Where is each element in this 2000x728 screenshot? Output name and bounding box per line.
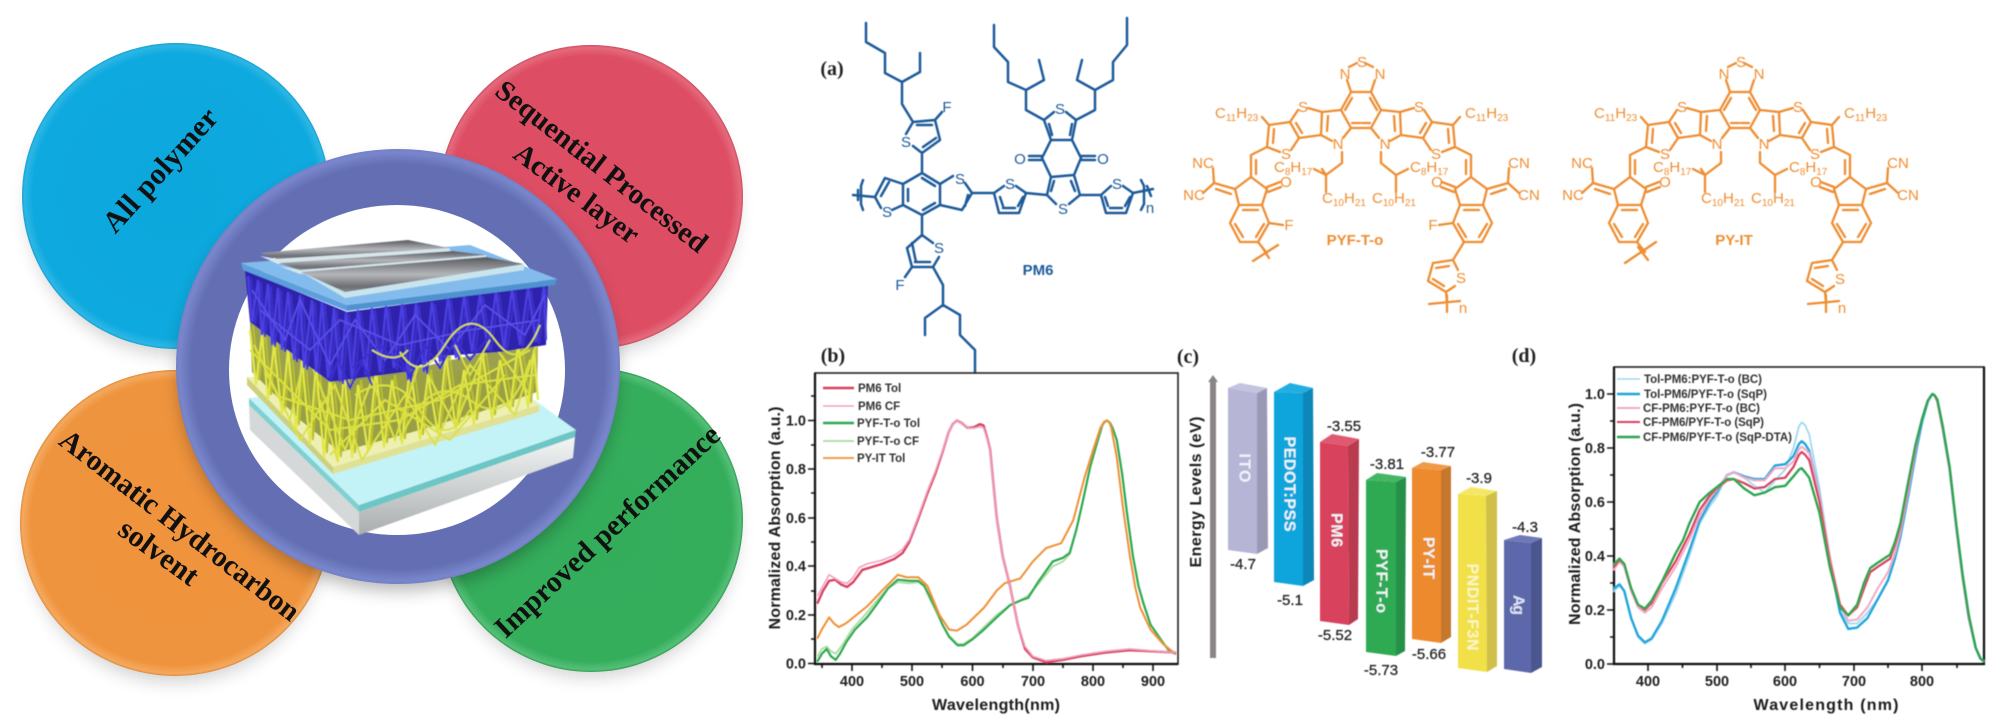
circle: sequential processed active layer: Active layer xyxy=(507,137,646,251)
chart axes xyxy=(767,373,1178,714)
structure: PY-IT: H xyxy=(1865,105,1876,122)
donor fibres: purple xyxy=(245,270,548,388)
circle: all polymer xyxy=(22,43,330,349)
structure: PYF-T-o: 8 xyxy=(1285,167,1291,178)
structure: PY-IT: 10 xyxy=(1712,198,1723,209)
panel label d: (d) xyxy=(1512,345,1536,367)
energy values: -3.9 xyxy=(1466,470,1492,487)
structure: PY-IT: C xyxy=(1653,159,1664,176)
structure: PY-IT: NC xyxy=(1562,187,1584,204)
structure: PYF-T-o: 8 xyxy=(1421,167,1427,178)
structure: PYF-T-o: C xyxy=(1322,190,1333,207)
chart axes: 0.2 xyxy=(786,608,806,624)
structure: PYF-T-o: NC xyxy=(1183,187,1205,204)
chart axes: 800 xyxy=(1081,674,1105,690)
structure: PM6: S xyxy=(1005,176,1015,193)
bar: Ag: Ag xyxy=(1510,595,1526,615)
top electrodes: silver strips xyxy=(260,240,524,298)
structure: PM6: S xyxy=(1112,176,1122,193)
structure: PY-IT: C xyxy=(1789,159,1800,176)
structure: PYF-T-o: S xyxy=(1281,146,1291,163)
bar: PEDOT:PSS xyxy=(1274,383,1314,586)
structure: PY-IT: S xyxy=(1810,146,1820,163)
circle: improved performance: Improved performance xyxy=(489,419,727,644)
structure: PYF-T-o: S xyxy=(1357,54,1367,71)
structure: PY-IT: 23 xyxy=(1876,113,1888,124)
structure: PYF-T-o: N xyxy=(1333,136,1343,153)
structure: PYF-T-o: n xyxy=(1459,300,1467,317)
structure: PYF-T-o xyxy=(1183,54,1540,317)
structure: PY-IT: C xyxy=(1751,190,1762,207)
energy values: -5.73 xyxy=(1364,662,1398,679)
structure: PYF-T-o: 17 xyxy=(1301,167,1313,178)
chart axes d: 0.8 xyxy=(1585,441,1605,457)
chart axes: 900 xyxy=(1141,674,1165,690)
bar: PM6: PM6 xyxy=(1328,513,1344,547)
structure: PM6: PM6 xyxy=(1023,262,1053,279)
structure: PM6: O xyxy=(1014,151,1026,168)
circle: all polymer: All polymer xyxy=(96,101,225,239)
structure: PYF-T-o: H xyxy=(1236,105,1247,122)
structure: PY-IT: N xyxy=(1754,66,1764,83)
legend d: CF-PM6:PYF-T-o (BC) xyxy=(1643,403,1760,415)
structure: PM6: S xyxy=(1058,201,1068,218)
structure: PY-IT: N xyxy=(1712,136,1722,153)
absorption curves xyxy=(818,420,1175,662)
energy values: -3.55 xyxy=(1327,418,1361,435)
structure: PYF-T-o: 23 xyxy=(1497,113,1509,124)
energy values: -5.1 xyxy=(1277,592,1303,609)
chart axes d: 400 xyxy=(1636,674,1660,690)
structure: PY-IT: S xyxy=(1835,271,1845,288)
structure: PY-IT: H xyxy=(1773,190,1784,207)
chart axes: Normalized Absorption (a.u.) xyxy=(767,406,784,630)
chart axes d: 800 xyxy=(1910,674,1934,690)
circle: sequential processed active layer xyxy=(439,45,743,349)
structure: PY-IT: H xyxy=(1723,190,1734,207)
energy values: -5.52 xyxy=(1318,627,1352,644)
circle: aromatic hydrocarbon solvent xyxy=(20,370,330,676)
chart axes d: Normalized Absorption (a.u.) xyxy=(1567,403,1584,625)
structure: PYF-T-o: N xyxy=(1380,136,1390,153)
bar: PYF-T-o: PYF-T-o xyxy=(1372,549,1390,613)
structure: PM6 xyxy=(853,18,1154,372)
legend b: PY-IT Tol xyxy=(857,453,905,465)
energy values: -4.3 xyxy=(1512,519,1538,536)
panel: feature circles xyxy=(20,43,743,682)
panel b: normalized absorption chart xyxy=(767,345,1178,714)
chart axes d: 0.2 xyxy=(1585,603,1605,619)
chart axes: 0.4 xyxy=(786,559,806,575)
structure: PM6: n xyxy=(1146,200,1154,217)
structure: PYF-T-o: H xyxy=(1486,105,1497,122)
structure: PY-IT: CN xyxy=(1897,187,1919,204)
structure: PY-IT: NC xyxy=(1571,155,1593,172)
structure: PY-IT: 23 xyxy=(1626,113,1638,124)
structure: PY-IT: C xyxy=(1844,105,1855,122)
structure: PYF-T-o: 10 xyxy=(1383,198,1394,209)
structure: PYF-T-o: C xyxy=(1372,190,1383,207)
chart axes d: 0.6 xyxy=(1585,495,1605,511)
panel label c: (c) xyxy=(1177,346,1199,368)
chart axes d: 0.4 xyxy=(1585,549,1605,565)
circle: improved performance xyxy=(439,368,743,672)
chart axes d: 0.0 xyxy=(1585,657,1605,673)
structure: PYF-T-o: S xyxy=(1414,99,1424,116)
energy values: -5.66 xyxy=(1412,646,1446,663)
structure: PY-IT: H xyxy=(1669,159,1680,176)
structure: PYF-T-o: N xyxy=(1375,66,1385,83)
bar: ITO: ITO xyxy=(1236,454,1252,482)
chart axes d: 700 xyxy=(1842,674,1866,690)
structure: PYF-T-o: 23 xyxy=(1247,113,1259,124)
structure: PYF-T-o: C xyxy=(1274,159,1285,176)
structure: PY-IT: 21 xyxy=(1734,198,1745,209)
structure: PY-IT: S xyxy=(1677,99,1687,116)
bar: PNDIT-F3N xyxy=(1458,487,1497,672)
chart axes d: 500 xyxy=(1705,674,1729,690)
legend d: Tol-PM6/PYF-T-o (SqP) xyxy=(1644,389,1767,401)
substrate layers xyxy=(247,370,576,535)
structure: PYF-T-o: 10 xyxy=(1333,198,1344,209)
structure: PYF-T-o: O xyxy=(1431,174,1443,191)
structure: PM6: F xyxy=(895,277,905,294)
structure: PYF-T-o: 21 xyxy=(1355,198,1366,209)
bar: PM6 xyxy=(1320,434,1359,625)
legend d xyxy=(1617,374,1792,444)
structure: PM6: S xyxy=(1055,101,1065,118)
top transport layer: blue slab xyxy=(241,245,557,311)
structure: PY-IT: 10 xyxy=(1762,198,1773,209)
structure: PYF-T-o: N xyxy=(1340,66,1350,83)
energy values xyxy=(1230,418,1538,679)
structure: PY-IT: 21 xyxy=(1784,198,1795,209)
structure: PYF-T-o: C xyxy=(1410,159,1421,176)
structure: PY-IT: S xyxy=(1736,54,1746,71)
bar: Ag xyxy=(1504,535,1542,673)
structure: PM6: O xyxy=(1097,151,1109,168)
structure: PY-IT: 11 xyxy=(1855,113,1866,124)
structure: PM6: S xyxy=(934,240,944,257)
structure: PY-IT: PY-IT xyxy=(1715,232,1753,249)
blend curves xyxy=(1614,394,1984,661)
energy values: -3.77 xyxy=(1421,444,1455,461)
circle shadows xyxy=(27,59,737,682)
structure: PYF-T-o: H xyxy=(1290,159,1301,176)
structure: PY-IT: 17 xyxy=(1816,167,1828,178)
structure: PYF-T-o: CN xyxy=(1518,187,1540,204)
circle: aromatic hydrocarbon solvent: solvent xyxy=(112,512,205,592)
bar: PY-IT: PY-IT xyxy=(1420,537,1436,579)
structure: PYF-T-o: 11 xyxy=(1226,113,1237,124)
energy axis arrow xyxy=(1208,375,1218,658)
chart axes: 1.0 xyxy=(786,414,806,430)
structure: PY-IT: H xyxy=(1805,159,1816,176)
legend d: Tol-PM6:PYF-T-o (BC) xyxy=(1644,374,1762,386)
structure: PYF-T-o: 17 xyxy=(1437,167,1449,178)
central ring xyxy=(176,149,620,590)
bar: PNDIT-F3N: PNDIT-F3N xyxy=(1464,564,1480,650)
legend b: PYF-T-o CF xyxy=(857,436,919,448)
structure: PYF-T-o: S xyxy=(1456,270,1466,287)
structure: PY-IT: S xyxy=(1793,99,1803,116)
legend b: PM6 CF xyxy=(858,401,900,413)
acceptor fibres: yellow xyxy=(250,322,538,462)
structure: PYF-T-o: NC xyxy=(1192,155,1214,172)
structure: PYF-T-o: C xyxy=(1215,105,1226,122)
structure: PY-IT: 17 xyxy=(1680,167,1692,178)
chart axes: 0.0 xyxy=(786,656,806,672)
legend d: CF-PM6/PYF-T-o (SqP) xyxy=(1643,417,1764,429)
structure: PM6: F xyxy=(942,99,952,116)
structure: PY-IT: N xyxy=(1759,136,1769,153)
legend b: PYF-T-o Tol xyxy=(857,418,920,430)
structure: PY-IT: H xyxy=(1615,105,1626,122)
structure: PM6: S xyxy=(901,134,911,151)
structure: PY-IT: CN xyxy=(1887,155,1909,172)
bar: PYF-T-o xyxy=(1366,473,1406,656)
energy values: -4.7 xyxy=(1230,556,1256,573)
structure: PM6: S xyxy=(955,171,965,188)
chart axes: 0.8 xyxy=(786,462,806,478)
structure: PY-IT: 11 xyxy=(1605,113,1616,124)
legend b xyxy=(823,383,920,465)
structure: PYF-T-o: O xyxy=(1280,174,1292,191)
structure: PYF-T-o: 21 xyxy=(1405,198,1416,209)
chart axes d: Wavelength (nm) xyxy=(1754,697,1898,714)
bar: PEDOT:PSS: PEDOT:PSS xyxy=(1280,436,1298,532)
energy axis label: Energy Levels (eV) xyxy=(1188,416,1205,568)
chart axes d: 1.0 xyxy=(1585,387,1605,403)
chart axes: Wavelength(nm) xyxy=(932,697,1060,714)
structure: PY-IT: 8 xyxy=(1800,167,1806,178)
structure: PY-IT: n xyxy=(1838,300,1846,317)
chart axes: 400 xyxy=(840,674,864,690)
structure: PYF-T-o: H xyxy=(1344,190,1355,207)
chart axes: 700 xyxy=(1021,674,1045,690)
structure: PY-IT: C xyxy=(1701,190,1712,207)
panel d: blend absorption chart xyxy=(1512,345,1984,714)
structure: PY-IT: C xyxy=(1594,105,1605,122)
legend d: CF-PM6/PYF-T-o (SqP-DTA) xyxy=(1643,432,1792,444)
legend b: PM6 Tol xyxy=(858,383,901,395)
structure: PYF-T-o: F xyxy=(1428,217,1438,234)
structure: PYF-T-o: F xyxy=(1284,217,1294,234)
panel c: energy level diagram xyxy=(1177,346,1542,679)
structure: PY-IT xyxy=(1562,54,1919,317)
chart axes d xyxy=(1567,367,1984,714)
circle: sequential processed active layer: Sequential Processed xyxy=(489,74,714,259)
panel label b: (b) xyxy=(821,345,845,367)
chart axes: 0.6 xyxy=(786,511,806,527)
chart axes: 600 xyxy=(960,674,985,690)
structure: PY-IT: O xyxy=(1810,174,1822,191)
structure: PYF-T-o: PYF-T-o xyxy=(1327,232,1383,249)
structure: PY-IT: N xyxy=(1719,66,1729,83)
bar: PY-IT xyxy=(1412,462,1451,643)
structure: PYF-T-o: CN xyxy=(1508,155,1530,172)
structure: PYF-T-o: S xyxy=(1431,146,1441,163)
chart axes: 500 xyxy=(900,674,924,690)
structure: PM6: S xyxy=(882,204,892,221)
structure: PYF-T-o: S xyxy=(1298,99,1308,116)
device stack illustration xyxy=(241,240,576,535)
panel a: molecular structures xyxy=(820,18,1919,372)
structure: PY-IT: O xyxy=(1659,174,1671,191)
structure: PYF-T-o: H xyxy=(1426,159,1437,176)
bar: ITO xyxy=(1228,383,1268,554)
structure: PY-IT: 8 xyxy=(1664,167,1670,178)
circle: aromatic hydrocarbon solvent: Aromatic Hydrocarbon xyxy=(53,424,306,628)
panel label a: (a) xyxy=(820,58,844,80)
energy values: -3.81 xyxy=(1370,456,1404,473)
structure: PY-IT: S xyxy=(1660,146,1670,163)
structure: PYF-T-o: 11 xyxy=(1476,113,1487,124)
structure: PYF-T-o: H xyxy=(1394,190,1405,207)
chart axes d: 600 xyxy=(1773,674,1797,690)
structure: PYF-T-o: C xyxy=(1465,105,1476,122)
